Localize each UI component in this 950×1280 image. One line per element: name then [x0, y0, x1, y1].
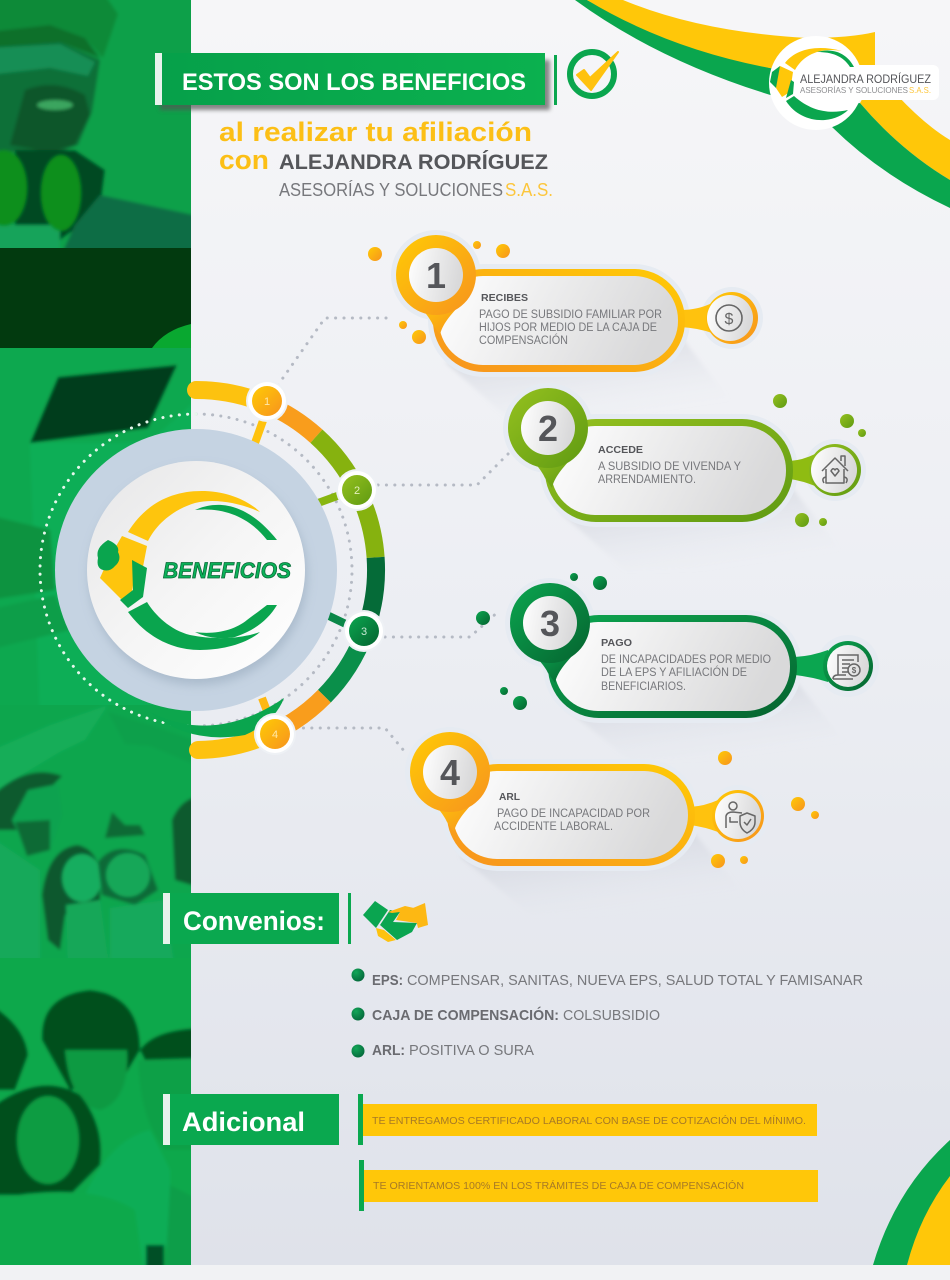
halo: [503, 383, 866, 527]
callout: certificado: TE ENTREGAMOS CERTIFICADO LABORAL CON BASE DE COTIZACIÓN DEL MÍNIMO.: [372, 1114, 806, 1127]
benefits wheel: [55, 380, 385, 755]
text: PAGO: [601, 637, 632, 649]
icon: check in circle: [570, 52, 618, 96]
knob 4: [254, 713, 296, 755]
body: [545, 419, 793, 522]
callout: orientacion: TE ORIENTAMOS 100% EN LOS TRÁMITES DE CAJA DE COMPENSACIÓN: [373, 1179, 744, 1192]
badge: [530, 648, 577, 683]
knob 2: [336, 469, 378, 511]
knob 3: 3: [361, 626, 367, 638]
knob 2: 2: [354, 485, 360, 497]
card 1: PAGO DE SUBSIDIO FAMILIAR POR: [479, 309, 662, 321]
title divider bar: [554, 55, 557, 105]
connector: [690, 800, 718, 832]
card 3: BENEFICIARIOS.: [601, 681, 686, 693]
halo: [405, 727, 769, 871]
card 3: DE LA EPS Y AFILIACIÓN DE: [601, 666, 747, 679]
card 4: ACCIDENTE LABORAL.: [494, 821, 613, 833]
left photo strip: house and hands: [0, 348, 191, 705]
shadow: [565, 680, 860, 760]
card 1: 1: [426, 255, 446, 296]
title banner: [155, 53, 550, 110]
list: convenios: POSITIVA O SURA: [409, 1042, 534, 1059]
knob 1: 1: [264, 396, 270, 408]
card 1 dots: [368, 241, 510, 344]
bullet: caja: [352, 1008, 364, 1020]
card 2: A SUBSIDIO DE VIVENDA Y: [598, 461, 741, 473]
subtitle: S.A.S.: [505, 180, 553, 200]
text: caja: CAJA DE COMPENSACIÓN:: [372, 1006, 559, 1024]
card 2 dots: [773, 394, 866, 527]
convenios banner: Convenios:: [183, 906, 325, 936]
body: [433, 269, 685, 372]
text: RECIBES: [481, 292, 528, 304]
lower logo swoosh: [150, 698, 284, 737]
badge: [430, 797, 476, 832]
bullet: arl: [352, 1044, 364, 1058]
convenios divider bar: [348, 893, 351, 944]
shadow: [445, 335, 745, 420]
logo: beneficios: [97, 491, 291, 650]
text: ARL: [499, 791, 521, 803]
left photo strip: laptop: [0, 248, 191, 348]
icon: invoice: $: [852, 666, 857, 675]
icon: invoice: [823, 641, 873, 691]
badge: [528, 453, 574, 488]
icon: dollar: [706, 292, 758, 344]
card 3: [505, 578, 879, 760]
halo: [505, 578, 879, 723]
top right swoosh: [575, 0, 950, 208]
card 2: 2: [538, 408, 558, 449]
card 3: DE INCAPACIDADES POR MEDIO: [601, 654, 771, 666]
card 2: ARRENDAMIENTO.: [598, 474, 696, 486]
logo top right: ALEJANDRA RODRÍGUEZ: [800, 71, 931, 86]
logo top right: [769, 36, 939, 130]
outer ring segments: [196, 390, 376, 750]
knob 1: [246, 380, 288, 422]
white centre disc: [89, 467, 307, 685]
card 1: [391, 230, 763, 420]
text: eps: EPS:: [372, 972, 403, 989]
callout: certificado: [358, 1094, 817, 1145]
text: arl: ARL:: [372, 1042, 405, 1059]
subtitle: ASESORÍAS Y SOLUCIONES: [279, 180, 503, 200]
card 2: [503, 383, 866, 570]
text: ACCEDE: [598, 444, 643, 456]
icon: person and shield: [712, 790, 764, 842]
icon: handshake: [363, 901, 428, 942]
badge: [416, 300, 462, 335]
card 4: PAGO DE INCAPACIDAD POR: [497, 808, 650, 820]
card 4 dots: [711, 751, 819, 868]
logo: beneficios: BENEFICIOS: [163, 558, 291, 583]
subtitle: con: [219, 145, 269, 175]
card 4: [405, 727, 769, 915]
body: [548, 615, 797, 718]
body: [447, 764, 695, 866]
connector: [790, 454, 815, 486]
left photo strip: children: [0, 958, 191, 1265]
connector: [795, 650, 828, 682]
subtitle: ALEJANDRA RODRÍGUEZ: [279, 151, 548, 174]
knob 4: 4: [272, 729, 278, 741]
adicional banner: Adicional: [182, 1107, 305, 1137]
knob 3: [343, 610, 385, 652]
logo top right: ASESORÍAS Y SOLUCIONES: [800, 85, 908, 95]
list: convenios: COLSUBSIDIO: [563, 1007, 660, 1024]
connector: [680, 303, 712, 333]
title banner: ESTOS SON LOS BENEFICIOS: [182, 69, 526, 96]
grey-blue disc: [55, 429, 337, 711]
shadow: [460, 830, 760, 915]
subtitle: al realizar tu afiliación: [219, 117, 532, 147]
card 1: HIJOS POR MEDIO DE LA CAJA DE: [479, 322, 657, 334]
bottom strip: [0, 1265, 950, 1280]
halo: [391, 230, 763, 377]
shadow: [560, 485, 855, 570]
card 1: COMPENSACIÓN: [479, 334, 568, 347]
icon: dollar: $: [725, 311, 734, 328]
card 4: 4: [440, 752, 460, 793]
list: convenios: COMPENSAR, SANITAS, NUEVA EPS, SALUD TOTAL Y FAMISANAR: [407, 972, 863, 989]
adicional banner: [163, 1094, 339, 1145]
left photo strip: worker: [0, 0, 191, 248]
dotted circle: [40, 414, 352, 726]
subtitle: [219, 117, 553, 200]
logo top right: S.A.S.: [909, 85, 931, 95]
list: convenios: [352, 968, 863, 1059]
callout: orientacion: [359, 1160, 818, 1211]
spokes: [255, 415, 350, 724]
dotted connectors: [278, 318, 510, 752]
icon: house: [809, 444, 861, 496]
convenios banner: [163, 893, 339, 944]
bottom right swoosh: [873, 1140, 950, 1265]
left photo strip: family: [0, 705, 191, 958]
bullet: eps: [352, 968, 364, 982]
card 3: 3: [540, 603, 560, 644]
card 3 dots: [476, 573, 607, 710]
